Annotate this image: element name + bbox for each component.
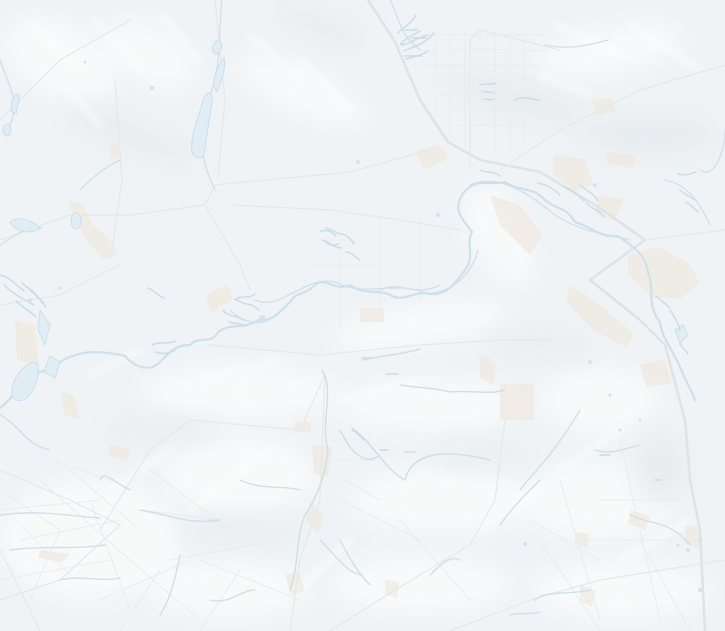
ponds: small scattered dots — [28, 60, 702, 592]
lake: oxbow chain north — [192, 93, 212, 158]
river: main channel — [0, 182, 695, 408]
river: southern tributaries — [290, 349, 505, 590]
lake: large southwest lake — [12, 362, 39, 401]
river: northwest tributaries — [0, 0, 725, 245]
lakes — [3, 40, 688, 401]
wetland clusters — [0, 15, 698, 480]
land use: settlements — [15, 98, 701, 607]
roads: motorways — [368, 0, 705, 631]
